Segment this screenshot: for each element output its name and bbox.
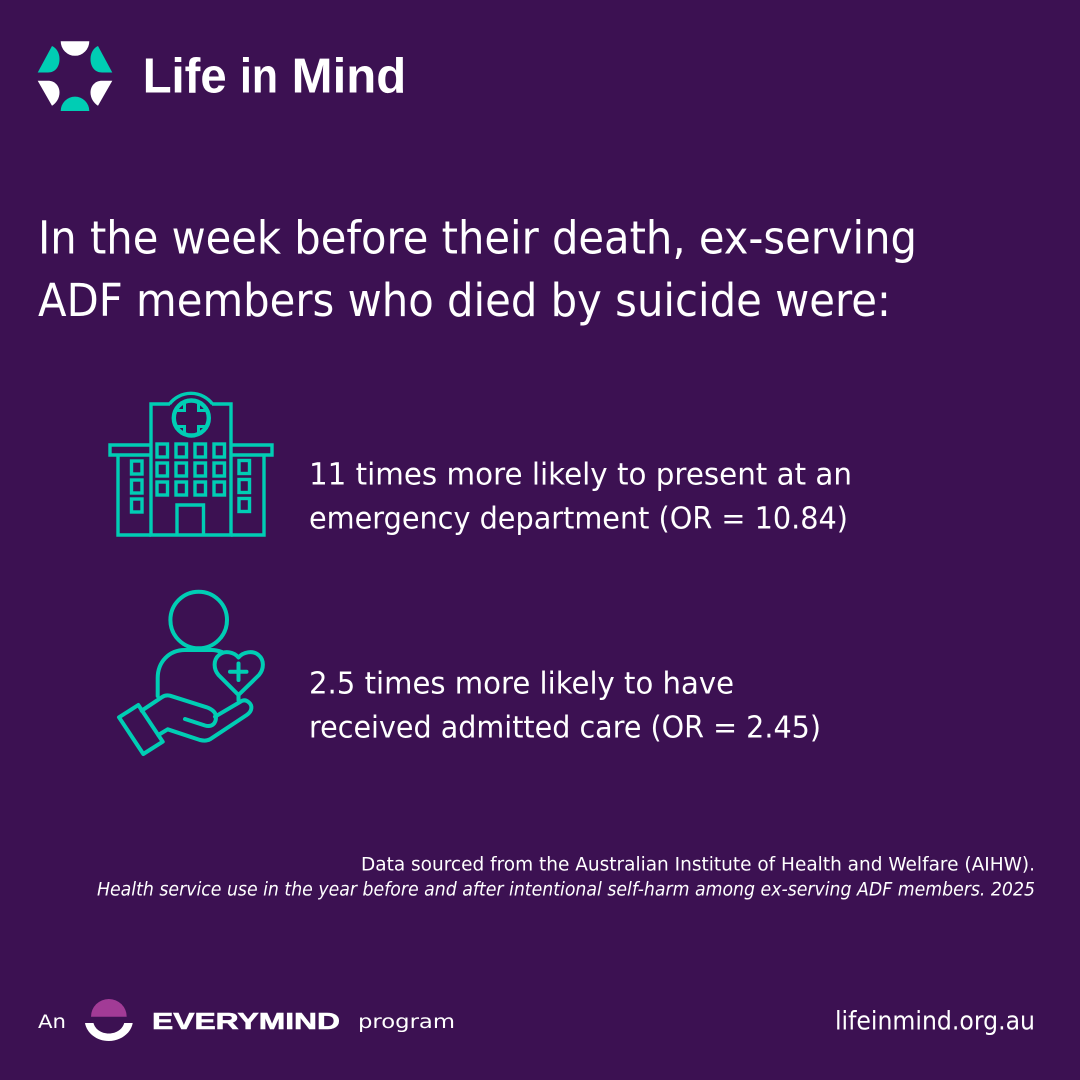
logo wordmark: Mind [292,50,406,104]
logo: An Everymind program [38,999,455,1041]
icon: logo ring of half discs [38,41,112,111]
text: admitted care statistic: received admitted care (OR = 2.45) [309,710,821,746]
text: emergency department statistic: 11 times more likely to present at an [309,458,852,492]
text: data source: Health service use in the year before and after intentional self-harm among ex-serving ADF members. 2025 [97,880,1035,900]
title: ADF members who died by suicide were: [38,274,891,327]
title [38,212,917,327]
text: emergency department statistic [309,458,852,536]
icon: Everymind smile [85,999,133,1041]
text: data source: Data sourced from the Australian Institute of Health and Welfare (AIHW). [361,854,1035,876]
text: data source [97,854,1035,900]
text: website: lifeinmind.org.au [835,1006,1035,1036]
title: In the week before their death, ex-serving [38,212,917,264]
logo: Life in Mind [38,41,406,111]
logo wordmark [143,50,406,104]
icon: person with heart on open hand [119,592,263,754]
text: An: An [38,1011,66,1033]
logo wordmark: in [240,50,278,104]
text: EVERYMIND: EVERYMIND [152,1008,340,1034]
icon: hospital [110,393,272,535]
logo wordmark: Life [143,50,227,104]
text: program: program [358,1011,455,1033]
text: admitted care statistic: 2.5 times more likely to have [309,666,734,702]
text: emergency department statistic: emergency department (OR = 10.84) [309,502,848,536]
text: admitted care statistic [309,666,821,746]
